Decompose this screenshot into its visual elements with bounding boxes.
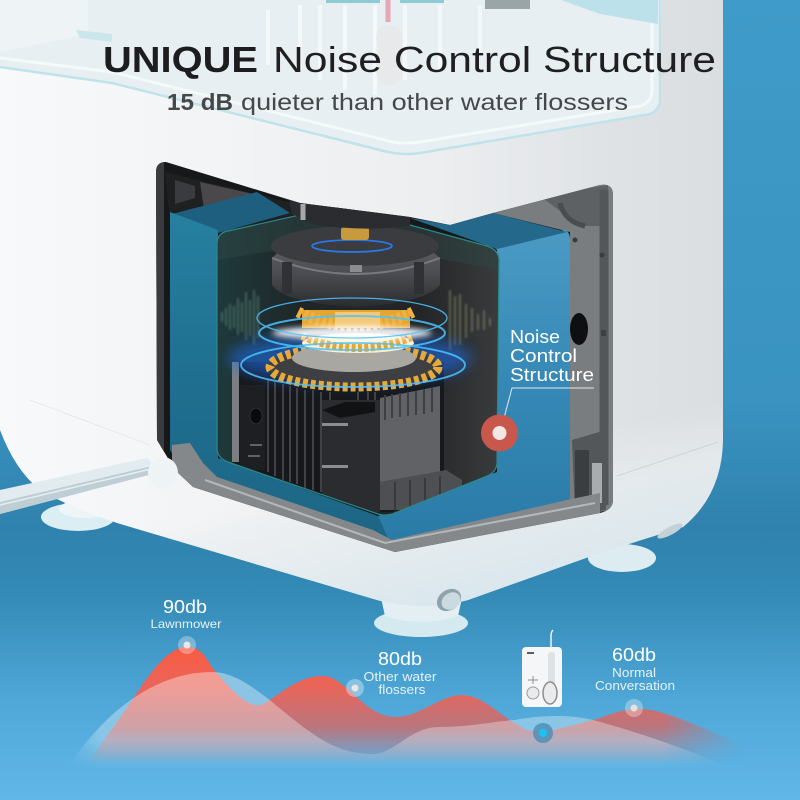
power cord: [0, 457, 178, 514]
80db label: flossers: [378, 683, 426, 697]
device cutaway window: [150, 155, 620, 560]
device body: [0, 0, 723, 616]
back blue panel: [172, 192, 290, 233]
motor top cap: [289, 200, 410, 229]
motor head: [271, 226, 440, 307]
60db label: 60db: [612, 645, 656, 665]
light noise curve: this flosser: [76, 672, 706, 765]
device: front foot: [374, 598, 468, 637]
motor base: [232, 362, 462, 512]
box right blue face: [378, 230, 570, 548]
window frame: [150, 155, 620, 560]
blue rings: [241, 298, 465, 387]
60db label: [595, 645, 675, 693]
icon: water flosser: [522, 630, 562, 707]
80db label: 80db: [378, 649, 422, 669]
90db label: [150, 597, 222, 631]
callout: noise control structure: Structure: [510, 364, 594, 385]
blue glow: [228, 332, 472, 384]
title: Noise Control Structure: [273, 39, 716, 80]
middle gear: [302, 333, 414, 353]
noise level chart: [60, 647, 745, 770]
white glow band: [272, 326, 432, 340]
marker: 90db: [178, 636, 196, 654]
subtitle: 15 dB: [167, 89, 233, 115]
lower gold gear: [268, 344, 440, 388]
title: [103, 39, 716, 80]
transparent water tank: [0, 0, 660, 154]
upper gear: [298, 310, 413, 328]
callout: noise control structure: Noise: [510, 326, 560, 347]
grey inner wall right: [493, 185, 613, 516]
60db label: Normal: [612, 666, 656, 680]
callout: noise control structure: [481, 326, 594, 452]
sound wave right: [450, 290, 490, 350]
marker: this flosser: [533, 723, 553, 743]
sound wave left: [222, 290, 258, 345]
device: right foot: [588, 544, 656, 572]
90db label: Lawnmower: [150, 617, 222, 631]
60db label: Conversation: [595, 679, 675, 693]
80db label: Other water: [364, 670, 436, 684]
marker: 80db: [346, 679, 364, 697]
device: left foot: [41, 500, 115, 531]
glass box with motor: [210, 200, 510, 520]
title: UNIQUE: [103, 39, 258, 80]
marker: 60db: [625, 699, 643, 717]
clip at wall bottom: [572, 430, 606, 515]
dark upper chamber: [165, 172, 300, 240]
box left blue face: [170, 212, 392, 548]
90db label: 90db: [163, 597, 207, 617]
80db label: [364, 649, 436, 697]
callout: noise control structure: Control: [510, 345, 577, 366]
hole in wall: [570, 313, 588, 345]
grey bottom ledge: [172, 443, 600, 552]
subtitle: quieter than other water flossers: [241, 89, 628, 115]
red noise curve: other flossers: [90, 647, 745, 770]
